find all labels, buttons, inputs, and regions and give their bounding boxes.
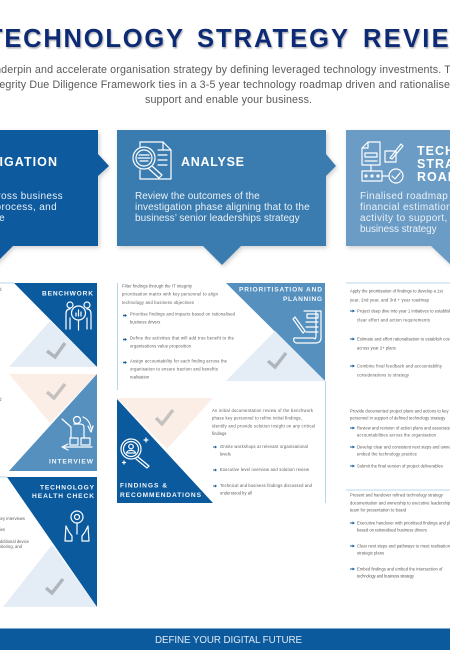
text: analyse summary: Review the outcomes of the	[135, 191, 260, 202]
check mark	[46, 579, 63, 593]
text block: handover: documentation and ownership to executive leadership	[350, 500, 450, 506]
text: roadmap summary	[360, 191, 450, 235]
text: investigation summary	[0, 191, 63, 224]
list: findings actions: understood by all	[220, 490, 252, 496]
text block: roadmap development: Apply the prioritisation of findings to develop a 1st	[350, 288, 444, 294]
label: prioritisation and planning: PRIORITISATION AND	[239, 286, 322, 294]
check mark	[47, 384, 65, 398]
text block: project plans: Review and revision of action plans and associated	[357, 426, 450, 430]
text block: roadmap development	[346, 283, 450, 378]
check mark	[268, 353, 286, 367]
intro text: support and enable your business.	[145, 94, 312, 106]
text: analyse summary: business’ senior leaderships strategy	[135, 213, 300, 224]
text block: project plans: accountabilities across the organisation	[357, 432, 437, 438]
list: prioritisation actions: organisations value proposition	[130, 344, 192, 348]
footer text: DEFINE YOUR DIGITAL FUTURE	[155, 635, 302, 646]
label: technology health check: TECHNOLOGY	[40, 484, 95, 492]
list: findings actions: Technical and business findings discussed and	[220, 483, 313, 488]
text block: handover: team for presentation to board	[350, 508, 407, 512]
intro text	[0, 64, 450, 106]
text block: project plans: personnel in support of defined technology strategy	[350, 416, 446, 420]
text: findings intro: An initial documentation review of the benchwork	[212, 408, 314, 413]
text: findings intro	[212, 408, 315, 436]
text block: roadmap development: clear effort and action requirements	[357, 318, 430, 322]
text: analyse summary: investigation phase aligning that to the	[135, 202, 310, 213]
label: interview: INTERVIEW	[49, 458, 94, 466]
heading: analyse: ANALYSE	[181, 155, 245, 169]
icon: document and magnifier	[133, 142, 171, 179]
icon: hands with gear	[65, 511, 89, 541]
text: prioritisation intro: Filter findings through the IT integrity	[122, 284, 193, 288]
list: prioritisation actions: Define the activities that will add true benefit to the	[130, 336, 235, 340]
label: prioritisation and planning	[239, 286, 322, 303]
heading: technology strategy roadmap	[417, 144, 450, 184]
panel: prioritisation and planning	[118, 283, 326, 503]
icon: people with magnifier	[66, 302, 91, 330]
icon: checklist scroll	[293, 311, 321, 343]
text block: handover	[346, 490, 450, 578]
list: findings actions: levels	[220, 452, 231, 456]
footer bar	[0, 628, 450, 650]
text block: handover: Embed findings and embed the intersection of	[357, 566, 443, 572]
icon: presenter and arrow	[62, 416, 93, 450]
column 1 fragments of text	[0, 283, 30, 549]
text: analyse summary	[135, 191, 310, 224]
title	[0, 25, 450, 53]
icon: roadmap documents	[362, 142, 403, 183]
text block: roadmap development: across year 2+ plans	[357, 346, 396, 350]
text block: handover: Present and handover refined technology strategy	[350, 492, 444, 498]
list: prioritisation actions: business drivers	[130, 320, 160, 324]
check mark	[156, 410, 173, 424]
text block: project plans: Submit the final version of project deliverables	[357, 464, 443, 468]
list: findings actions: Onsite workshops at relevant organisational	[220, 444, 308, 449]
text block: handover: technology and business strategy	[357, 574, 415, 578]
text: findings intro: findings	[212, 431, 227, 436]
text: roadmap summary: business strategy	[360, 224, 437, 235]
text: findings intro: phase key personnel to refine initial findings,	[212, 416, 302, 420]
icon: magnifier with person	[121, 438, 149, 468]
text block: roadmap development: Project deep dive into year 1 initiatives to establish	[357, 308, 450, 314]
label: technology health check	[32, 484, 95, 500]
panel: findings and recommendations	[117, 398, 315, 503]
text block: handover: strategic plans	[357, 550, 384, 556]
panel: analyse	[117, 130, 336, 265]
text block: project plans: Provide documented project plans and actions to key	[350, 408, 449, 414]
label: technology health check: HEALTH CHECK	[32, 493, 94, 500]
label: findings and recommendations	[120, 482, 202, 499]
list: prioritisation actions: organisation to ensure traction and benefits	[130, 366, 218, 372]
card: technology health check	[3, 477, 97, 607]
text block: roadmap development: considerations to strategy	[357, 372, 410, 378]
title: STRATEGY	[197, 25, 348, 53]
text: prioritisation intro	[122, 284, 219, 305]
check mark	[47, 343, 65, 357]
panel: investigation	[0, 130, 109, 264]
text block: project plans: embed the technology practice	[357, 452, 418, 456]
card: benchwork	[9, 283, 97, 367]
text block: project plans	[350, 408, 450, 468]
list: prioritisation actions	[123, 312, 236, 380]
label: prioritisation and planning: PLANNING	[283, 296, 322, 303]
list: prioritisation actions: Prioritise findings and impacts based on rationalised	[130, 312, 236, 316]
list: findings actions	[213, 444, 313, 496]
card: prioritisation triangles	[226, 283, 325, 381]
list: prioritisation actions: realisation	[130, 374, 150, 380]
list: prioritisation actions: Assign accountability for each finding across the	[130, 358, 228, 364]
label: benchwork: BENCHWORK	[42, 290, 93, 298]
list: findings actions: Executive level overview and solution review	[220, 467, 309, 472]
label: findings and recommendations: FINDINGS &	[120, 482, 167, 490]
text: prioritisation intro: technology and business objectives	[122, 300, 194, 305]
text: prioritisation intro: prioritisation matrix with key personnel to align	[122, 292, 219, 296]
card: interview	[9, 374, 97, 471]
text: findings intro: identify and provide solution insight on any critical	[212, 424, 315, 428]
text block: roadmap development: year, 2nd year, and 3rd + year roadmap	[350, 298, 430, 302]
panel: technology strategy roadmap	[346, 130, 450, 264]
text block: handover: based on rationalised business drivers	[357, 528, 427, 532]
label: findings and recommendations: RECOMMENDATIONS	[120, 492, 202, 499]
text block: roadmap development: Combine final feedback and accountability	[357, 364, 443, 368]
